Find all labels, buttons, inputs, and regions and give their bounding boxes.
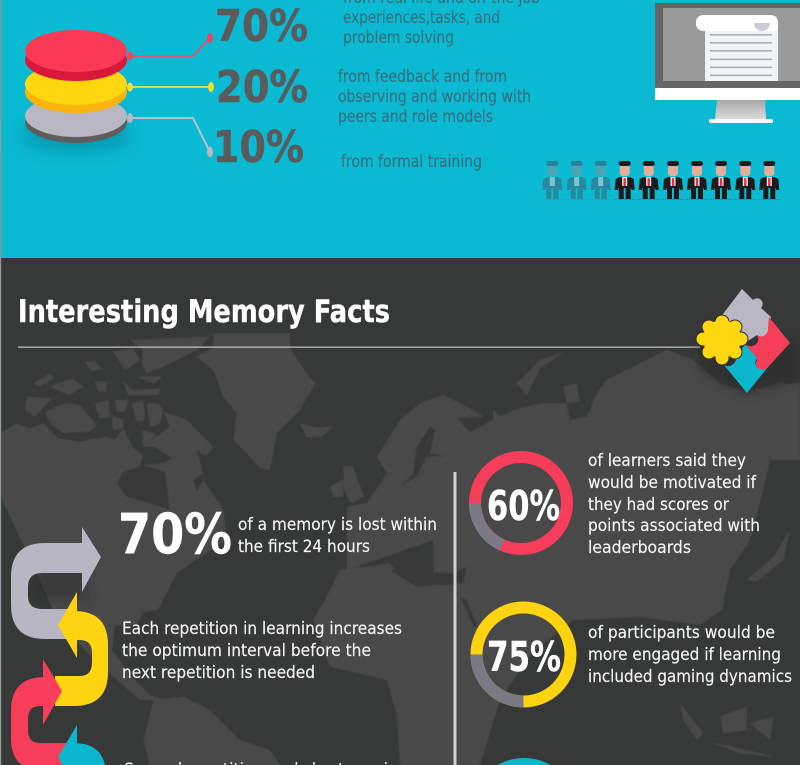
connector: yellow line xyxy=(127,82,214,92)
text: 60 percent description: they had scores or xyxy=(588,495,729,515)
icon: four-piece jigsaw puzzle xyxy=(696,289,800,395)
text: 75 percent description: of participants would be xyxy=(588,623,775,643)
connector: grey line xyxy=(127,113,213,158)
text: 70 percent description: problem solving xyxy=(343,28,454,47)
text: repetition fact: the optimum interval before the xyxy=(122,641,371,661)
text: 10 percent description: from formal training xyxy=(341,152,482,171)
text: repetition fact: next repetition is needed xyxy=(122,663,315,683)
arrow: yellow xyxy=(55,592,108,706)
text: 60 percent description: leaderboards xyxy=(588,538,691,558)
stat: 10%: 10% xyxy=(213,122,304,173)
text: 20 percent description: observing and working with xyxy=(338,87,531,106)
arrow: grey xyxy=(11,527,101,639)
arrow: red xyxy=(11,659,70,765)
text: 70 percent description xyxy=(343,0,540,47)
text: 60 percent description xyxy=(588,451,760,558)
chart: 60 percent ring xyxy=(475,457,567,549)
text: repetition fact xyxy=(122,619,402,683)
text: 60 percent description: points associated with xyxy=(588,516,760,536)
text: 20 percent description: from feedback and from xyxy=(338,67,507,86)
stat: 70 percent of memory lost: the first 24 hours xyxy=(238,537,370,557)
text: repetition fact: Each repetition in learning increases xyxy=(122,619,402,639)
heading: Interesting Memory Facts: Interesting Memory Facts xyxy=(18,294,390,330)
stat: 70 percent of memory lost: of a memory is lost within xyxy=(238,515,437,535)
chart: cropped teal ring xyxy=(498,758,550,765)
stat: 70 percent of memory lost xyxy=(118,502,437,566)
chart: 75 percent ring xyxy=(476,608,570,702)
text: 60 percent description: of learners said they xyxy=(588,451,746,471)
stat: 70 percent of memory lost: 70% xyxy=(118,502,232,566)
stat: 20%: 20% xyxy=(216,62,308,113)
stat: 70%: 70% xyxy=(215,1,308,52)
text: 70 percent description: experiences,tasks, and xyxy=(343,8,500,27)
icon: computer monitor with document xyxy=(655,3,800,123)
chart: 75 percent ring: 75% xyxy=(487,633,561,681)
icon: stacked discs xyxy=(20,30,132,152)
icon: looping arrows xyxy=(11,527,108,765)
text: 20 percent description: peers and role models xyxy=(338,107,493,126)
text: 75 percent description xyxy=(588,623,792,687)
arrow: teal xyxy=(58,725,105,765)
text: 60 percent description: would be motivated if xyxy=(588,473,757,493)
chart: 60 percent ring: 60% xyxy=(487,482,560,530)
text: 20 percent description xyxy=(338,67,531,126)
divider xyxy=(454,472,456,765)
icon: row of ten people, three faded xyxy=(541,161,780,200)
text: 75 percent description: more engaged if learning xyxy=(588,645,781,665)
connector: red line xyxy=(127,33,213,60)
world map background xyxy=(0,333,800,765)
panel: teal learning model section xyxy=(0,0,800,258)
